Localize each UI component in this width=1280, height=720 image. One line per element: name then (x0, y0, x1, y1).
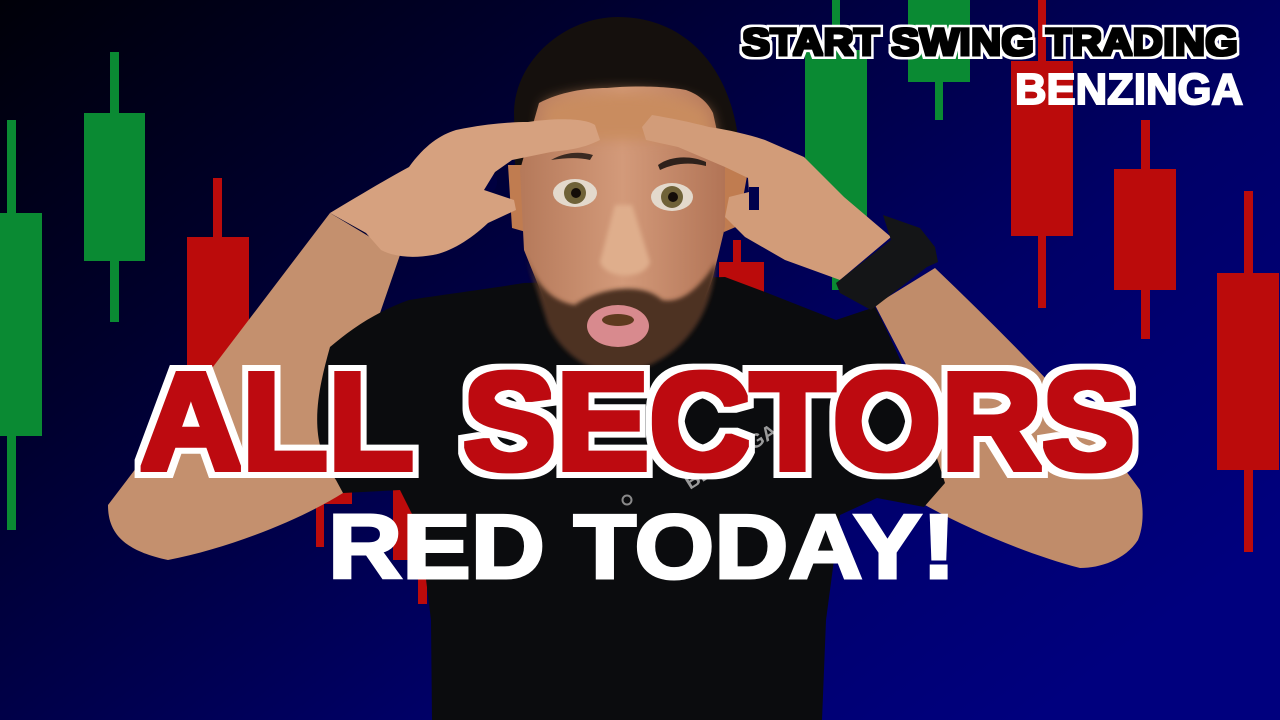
right eye (651, 183, 693, 211)
candle: red lower left (316, 490, 352, 547)
candle: green center right (805, 0, 867, 290)
ears (508, 165, 749, 232)
candle: red lower middle (393, 488, 427, 604)
shirt logo ring (622, 496, 632, 504)
left hand (330, 119, 600, 257)
candle: red left (187, 178, 249, 407)
candle: red right (1114, 120, 1176, 339)
candle: green top (908, 0, 970, 120)
right upper arm and forearm (875, 268, 1143, 568)
candle: red top right (1011, 0, 1073, 308)
candle: red far right (1217, 191, 1279, 552)
right hand (642, 115, 891, 280)
series title: START SWING TRADING (742, 22, 1238, 64)
candle: green left (84, 52, 145, 322)
brand name: BENZINGA (1015, 65, 1243, 114)
hair (514, 17, 737, 170)
left eye (553, 179, 597, 207)
headline: all sectors (140, 345, 1135, 499)
hole beside right hand (749, 187, 759, 210)
forehead shading (540, 92, 715, 140)
headline: all sectors: SECTORS (463, 345, 1135, 499)
subheadline: red today: RED TODAY! (328, 497, 956, 598)
right eyebrow (658, 157, 706, 170)
black t-shirt (317, 277, 945, 720)
left upper arm and forearm (108, 213, 400, 560)
candle: green far left (0, 120, 42, 530)
headline: all sectors: ALL (140, 345, 414, 499)
nose (600, 205, 650, 276)
mouth (587, 305, 649, 347)
watch (836, 215, 938, 310)
beard (524, 250, 716, 375)
candle: red behind arm (719, 240, 764, 292)
hole beside left hand (483, 172, 497, 192)
face (520, 87, 725, 367)
shirt logo text: BENZINGA (681, 420, 781, 494)
person (108, 17, 1143, 720)
left eyebrow (551, 153, 593, 160)
